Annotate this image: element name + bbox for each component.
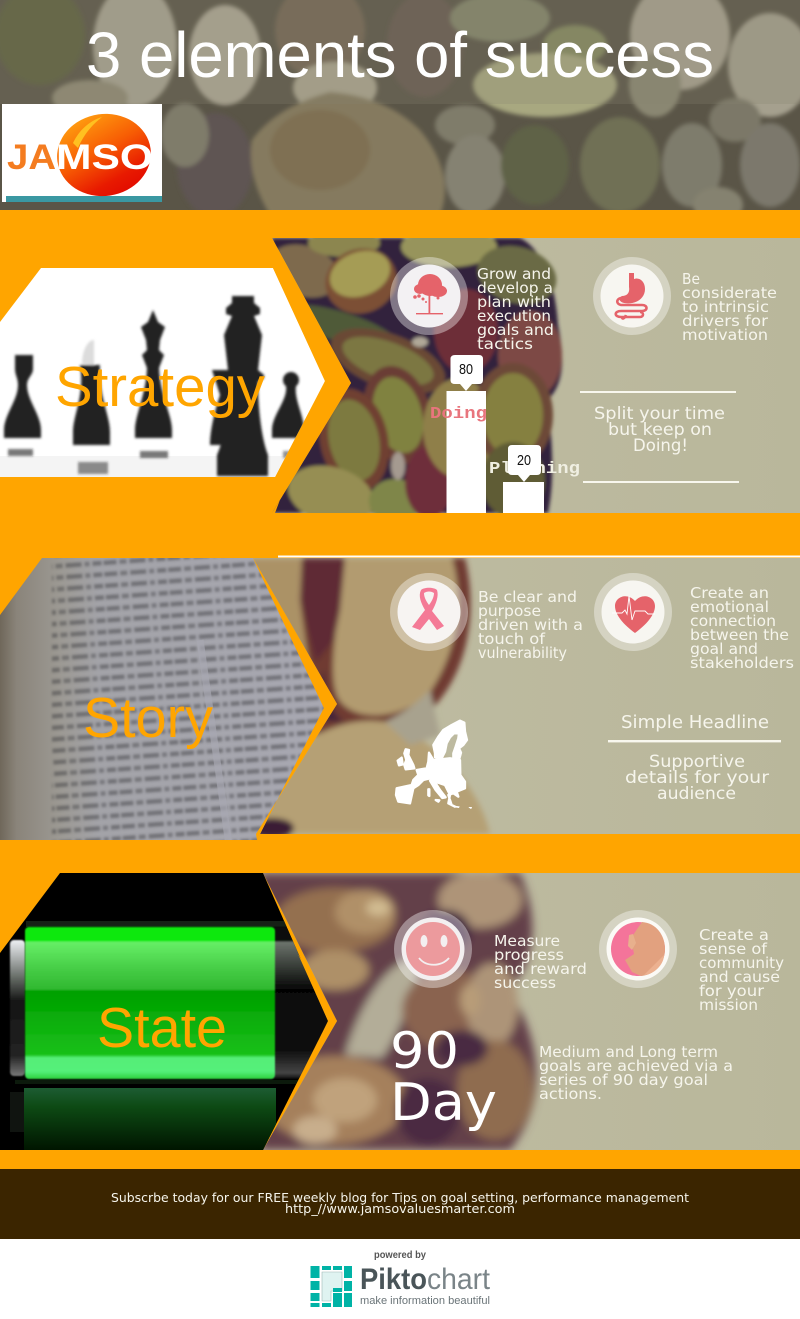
icon: community [599, 910, 677, 988]
battery photo [0, 873, 340, 1150]
chess photo [0, 268, 330, 478]
text: medium and long term goals: Medium and Long term [539, 1043, 718, 1061]
bar chart: doing vs planning: Planning [489, 460, 580, 479]
callout: split your time: but keep on [608, 420, 712, 440]
text: simple headline [608, 712, 781, 804]
piktochart branding: powered by [374, 1250, 426, 1261]
text: be clear: touch of [478, 630, 546, 648]
text: simple headline: audience [657, 784, 736, 804]
logo: JAMSO [2, 104, 162, 202]
walnut photo [260, 872, 800, 1150]
text: be considerate: Be [682, 270, 700, 288]
icon: stomach [593, 257, 671, 335]
footer band [0, 1169, 800, 1239]
text: create a sense of community: mission [699, 996, 758, 1014]
icon: tree [390, 257, 468, 335]
text: medium and long term goals: series of 90 day goal [539, 1071, 708, 1089]
panel: state [0, 872, 800, 1150]
title: 3 elements of success [86, 19, 714, 91]
piktochart branding: make information beautiful [360, 1295, 490, 1307]
text: grow and develop: develop a [477, 279, 553, 297]
bar chart: doing vs planning [430, 355, 580, 513]
story orange arrow edge [253, 558, 337, 840]
panel: story [0, 555, 800, 849]
icon: smiley [394, 910, 472, 988]
text: grow and develop: plan with [477, 293, 551, 311]
text: grow and develop: execution [477, 307, 551, 325]
text: measure progress: success [494, 974, 556, 992]
text: measure progress: progress [494, 946, 564, 964]
text: medium and long term goals: actions. [539, 1085, 602, 1103]
text: simple headline: details for your [625, 768, 769, 788]
text: medium and long term goals: goals are achieved via a [539, 1057, 733, 1075]
story nut photo [250, 558, 800, 840]
bar chart: doing vs planning: 80 [459, 361, 473, 378]
text: create a sense of community: community [699, 954, 784, 972]
text: be clear: vulnerability [478, 644, 567, 662]
text: grow and develop: Grow and [477, 265, 551, 283]
text: create emotional connection: stakeholders [690, 654, 794, 672]
callout: split your time [580, 391, 739, 483]
text: medium and long term goals [539, 1043, 733, 1103]
text: measure progress: Measure [494, 932, 560, 950]
text: grow and develop: tactics [477, 335, 533, 353]
text: simple headline: Simple Headline [621, 712, 769, 733]
story heading: Story [83, 686, 213, 750]
text: grow and develop: goals and [477, 321, 554, 339]
strategy nut photo [272, 238, 800, 513]
footer band: http_//www.jamsovaluesmarter.com [285, 1201, 515, 1216]
panel: strategy [0, 238, 800, 513]
big label: 90 day: Day [390, 1073, 497, 1133]
book photo [0, 555, 332, 849]
text: be considerate [682, 270, 777, 344]
text: be clear: driven with a [478, 616, 583, 634]
text: simple headline: Supportive [649, 752, 745, 772]
piktochart branding [0, 1239, 800, 1319]
text: create a sense of community: sense of [699, 940, 768, 958]
text: create emotional connection [690, 584, 794, 672]
text: measure progress [494, 932, 587, 992]
bar chart: doing vs planning: 20 [517, 452, 531, 469]
white rule above story [278, 556, 800, 558]
page background orange [0, 210, 800, 1169]
text: be clear: purpose [478, 602, 541, 620]
piktochart branding: chart [427, 1263, 491, 1296]
text: be considerate: to intrinsic [682, 298, 769, 316]
icon: heart with pulse [594, 573, 672, 651]
text: be considerate: considerate [682, 284, 777, 302]
callout: split your time: Doing! [633, 436, 688, 456]
logo: JAMSO: MSO [56, 138, 153, 177]
text: be considerate: motivation [682, 326, 768, 344]
map: europe [396, 721, 472, 809]
callout: split your time: Split your time [594, 404, 725, 424]
state heading: State [97, 996, 227, 1060]
text: create a sense of community: and cause [699, 968, 780, 986]
text: be clear: Be clear and [478, 588, 577, 606]
text: be clear [478, 588, 583, 662]
text: be considerate: drivers for [682, 312, 769, 330]
state orange arrow edge [298, 954, 337, 1080]
text: create a sense of community: for your [699, 982, 765, 1000]
text: create a sense of community: Create a [699, 926, 769, 944]
text: grow and develop [477, 265, 554, 353]
piktochart logo mark [310, 1266, 352, 1307]
big label: 90 day [390, 1022, 497, 1133]
strategy heading: Strategy [55, 355, 265, 419]
bar chart: doing vs planning: Doing [430, 405, 487, 424]
strategy orange arrow edge [272, 238, 351, 513]
footer band: Subscrbe today for our FREE weekly blog for Tips on goal setting, performance management [111, 1190, 689, 1205]
piktochart branding: Pikto [360, 1263, 427, 1296]
text: create emotional connection: emotional [690, 598, 769, 616]
text: create emotional connection: between the [690, 626, 789, 644]
logo: JAMSO: JA [7, 138, 56, 177]
text: measure progress: and reward [494, 960, 587, 978]
icon: ribbon [390, 573, 468, 651]
text: create emotional connection: connection [690, 612, 776, 630]
text: create emotional connection: Create an [690, 584, 769, 602]
text: create emotional connection: goal and [690, 640, 758, 658]
header photo banner [0, 0, 800, 223]
text: create a sense of community [699, 926, 784, 1014]
big label: 90 day: 90 [390, 1022, 459, 1080]
